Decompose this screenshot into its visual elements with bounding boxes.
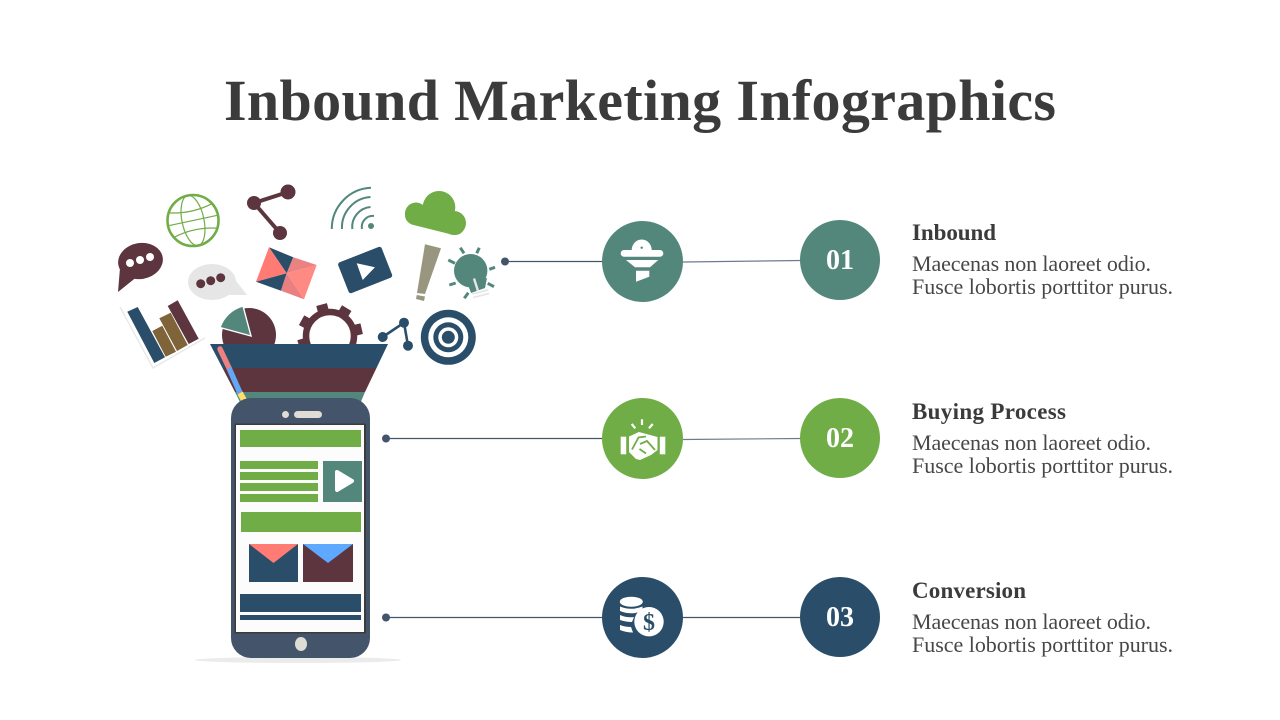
icon: gear <box>297 303 363 360</box>
phone screen: text lines <box>240 461 318 502</box>
text block: Inbound <box>912 220 1173 299</box>
connector: row 2 <box>382 434 801 442</box>
text block: Inbound: Maecenas non laoreet odio. <box>912 251 1151 276</box>
phone shadow <box>195 657 401 663</box>
icon badge: coins: $ <box>643 610 655 636</box>
icon: video player <box>337 246 393 294</box>
number badge: 02: 02 <box>826 423 854 454</box>
text block: Inbound: Inbound <box>912 220 996 245</box>
phone <box>231 398 370 658</box>
phone screen: footer bars <box>240 594 361 620</box>
text block: Conversion: Conversion <box>912 578 1026 603</box>
number badge: 01 <box>800 220 880 300</box>
icon: exclamation mark <box>416 244 441 301</box>
illustration: phone with funnel and marketing icons <box>115 184 495 663</box>
phone screen: middle bar <box>241 512 361 532</box>
icon badge: funnel <box>602 221 683 302</box>
text block: Inbound: Fusce lobortis porttitor purus. <box>912 274 1173 299</box>
icon badge: coins <box>602 577 683 658</box>
text block: Buying Process: Buying Process <box>912 399 1066 424</box>
phone screen: blue envelope <box>249 544 298 582</box>
connector: row 1 <box>501 258 801 266</box>
text block: Buying Process <box>912 399 1173 478</box>
number badge: 03 <box>800 577 880 657</box>
text block: Conversion <box>912 578 1173 657</box>
icon: pie chart <box>220 306 276 362</box>
funnel <box>210 344 388 404</box>
icon badge: handshake <box>602 398 683 479</box>
title: Inbound Marketing Infographics <box>224 68 1056 133</box>
number badge: 02 <box>800 398 880 478</box>
icon: target <box>421 310 476 365</box>
icon: grey speech bubble <box>188 264 247 300</box>
icon: bar chart <box>120 300 205 368</box>
text block: Buying Process: Maecenas non laoreet odio. <box>912 430 1151 455</box>
icon: folded kite diamond <box>256 247 317 299</box>
connector: row 3 <box>382 614 801 622</box>
icon: globe <box>163 190 223 251</box>
text block: Conversion: Maecenas non laoreet odio. <box>912 609 1151 634</box>
icon: wifi signal <box>332 188 374 229</box>
icon: maroon speech bubble <box>115 239 166 292</box>
icon: cloud <box>405 191 466 235</box>
text block: Buying Process: Fusce lobortis porttitor purus. <box>912 453 1173 478</box>
phone screen: maroon envelope <box>303 544 353 582</box>
phone screen: video tile <box>323 461 362 502</box>
icon: connected nodes <box>378 318 413 351</box>
phone screen: header bar <box>240 430 361 447</box>
number badge: 01: 01 <box>826 245 854 276</box>
icon: share nodes <box>247 184 296 240</box>
text block: Conversion: Fusce lobortis porttitor purus. <box>912 632 1173 657</box>
icon: light bulb <box>448 248 495 298</box>
number badge: 03: 03 <box>826 602 854 633</box>
